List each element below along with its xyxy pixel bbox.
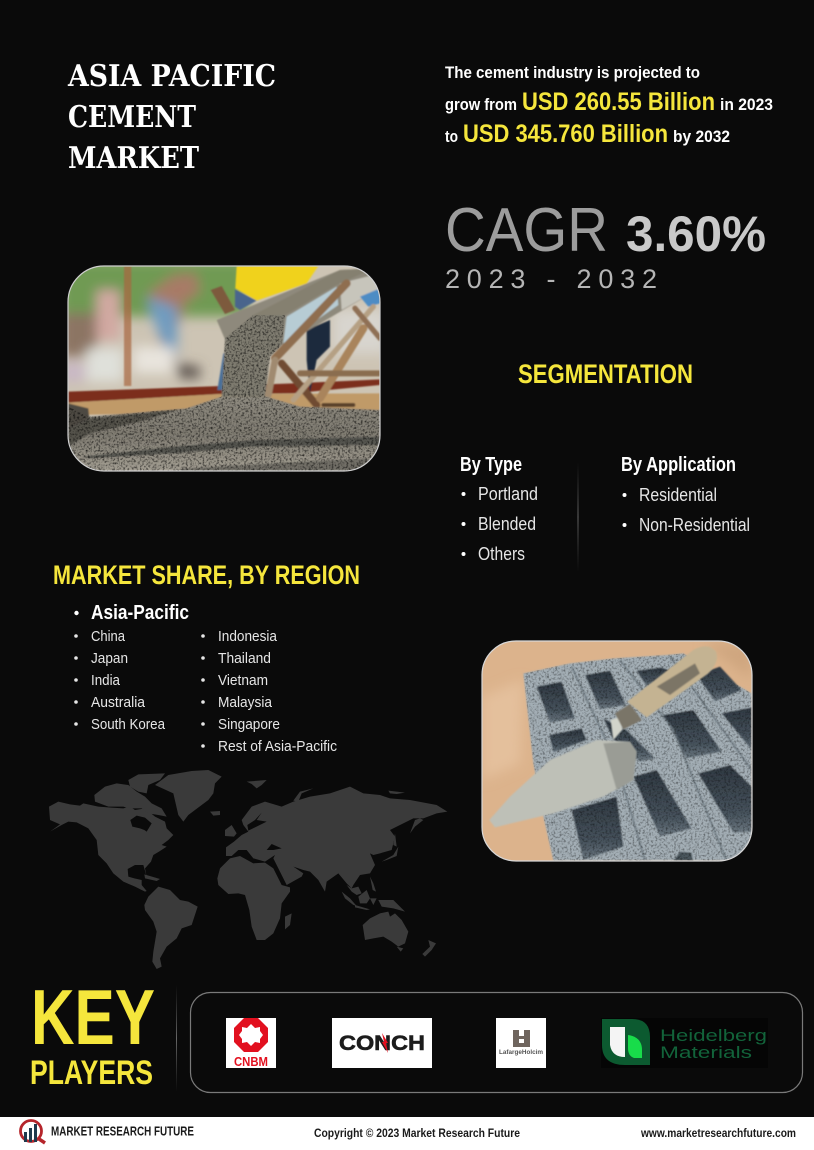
- segment list: by application: By Application: [621, 454, 736, 476]
- region list: Indonesia: [218, 628, 278, 645]
- projection statement: in 2023: [720, 95, 773, 114]
- footer: MARKET RESEARCH FUTURE: [51, 1124, 194, 1138]
- heading: key players: PLAYERS: [30, 1054, 153, 1092]
- heading: key players: KEY: [31, 973, 155, 1061]
- footer: Copyright © 2023 Market Research Future: [314, 1126, 520, 1140]
- region list: Asia-Pacific: [91, 602, 189, 624]
- logo: Heidelberg Materials: [601, 1018, 768, 1068]
- segment list: by type: By Type: [460, 454, 522, 476]
- segment list: by application: Residential: [639, 485, 717, 505]
- region list: Australia: [91, 694, 146, 711]
- region list: Vietnam: [218, 672, 268, 689]
- logo: Heidelberg Materials: Heidelberg: [660, 1026, 767, 1045]
- segment list: by type: Others: [478, 544, 525, 564]
- projection statement: USD 345.760 Billion: [463, 120, 668, 148]
- CAGR: CAGR: [445, 196, 608, 265]
- CAGR: 2023 - 2032: [445, 264, 657, 294]
- title: ASIA PACIFIC: [67, 59, 276, 94]
- photo border: [482, 641, 752, 861]
- CAGR: [445, 196, 766, 294]
- photo: pouring concrete: [60, 260, 387, 471]
- segment list: by type: [460, 454, 538, 564]
- segment list: by type: Portland: [478, 484, 538, 504]
- logo: LafargeHolcim: LafargeHolcim: [499, 1050, 543, 1056]
- title: CEMENT: [68, 100, 197, 135]
- region list: Thailand: [218, 650, 271, 667]
- region list: Rest of Asia-Pacific: [218, 738, 337, 755]
- segment list: by application: [621, 454, 750, 535]
- heading: segmentation: SEGMENTATION: [518, 359, 693, 389]
- key players panel: [190, 992, 802, 1092]
- logo: Heidelberg Materials: Materials: [660, 1043, 752, 1062]
- logo: Conch: [332, 1018, 432, 1068]
- logo: LafargeHolcim: [496, 1018, 546, 1068]
- heading: key players: [30, 973, 155, 1092]
- title: MARKET: [68, 141, 200, 176]
- footer: [0, 1117, 814, 1150]
- world map: [49, 770, 447, 969]
- region list: Japan: [91, 650, 128, 667]
- region list: China: [91, 628, 126, 645]
- region list: Malaysia: [218, 694, 273, 711]
- segment list: by application: Non-Residential: [639, 515, 750, 535]
- logo: Conch: CONCH: [339, 1032, 425, 1055]
- region list: [74, 602, 337, 755]
- logo: CNBM: [226, 1018, 276, 1069]
- region list: India: [91, 672, 121, 689]
- projection statement: The cement industry is projected to: [445, 63, 700, 82]
- segment list: by type: Blended: [478, 514, 536, 534]
- footer logo: [20, 1120, 45, 1143]
- region list: South Korea: [91, 716, 166, 733]
- photo: trowel on concrete blocks: [482, 641, 752, 861]
- region list: Singapore: [218, 716, 280, 733]
- title: [67, 59, 276, 176]
- photo border: [68, 266, 380, 471]
- projection statement: by 2032: [673, 127, 730, 146]
- heading: market share: MARKET SHARE, BY REGION: [53, 560, 360, 590]
- CAGR: 3.60%: [626, 206, 766, 262]
- logo: CNBM: CNBM: [234, 1054, 268, 1069]
- projection statement: grow from: [445, 95, 517, 114]
- projection statement: USD 260.55 Billion: [522, 88, 715, 116]
- projection statement: [445, 63, 773, 148]
- projection statement: to: [445, 127, 458, 146]
